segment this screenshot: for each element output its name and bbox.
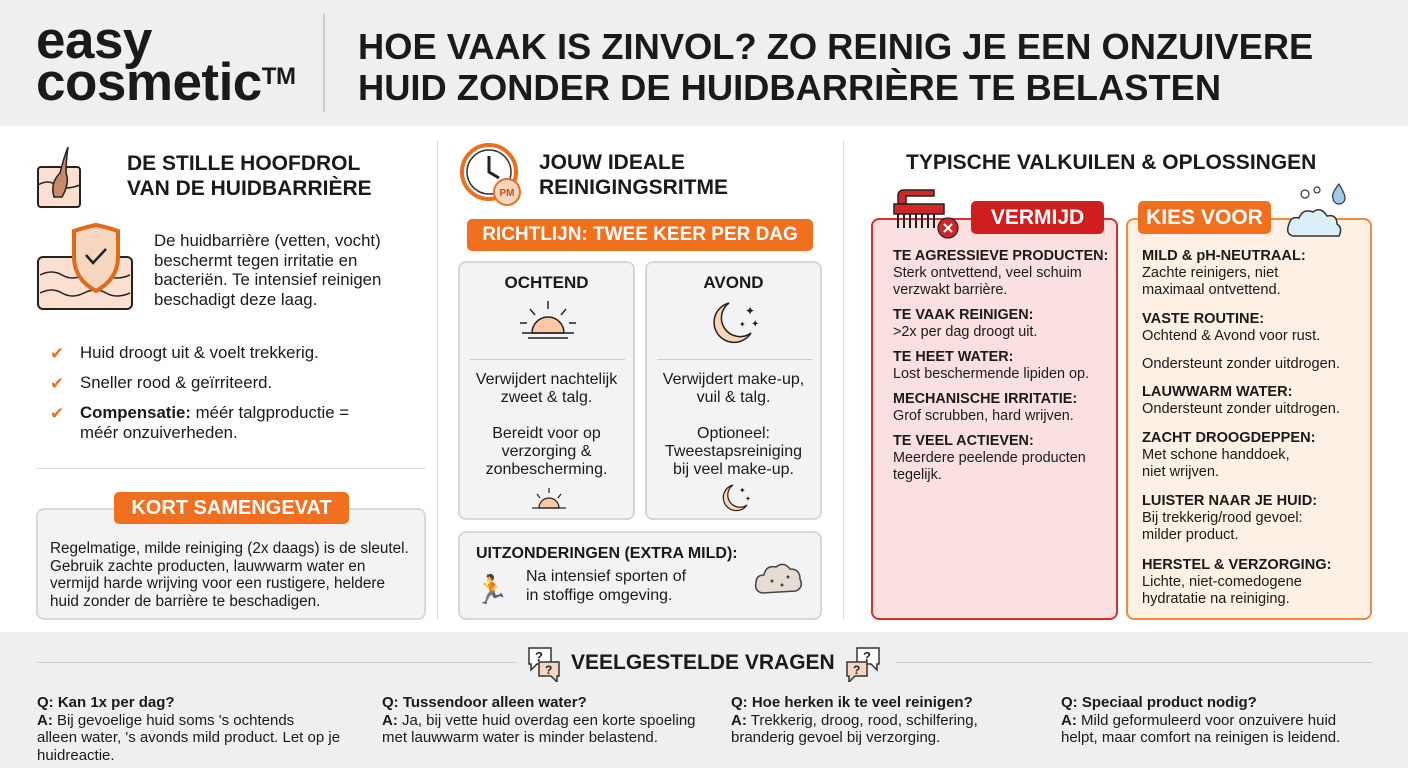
header band [0,0,1408,126]
panel: vermijd: Lost beschermende lipiden op. [893,366,1089,382]
panel: vermijd: verzwakt barrière. [893,282,1007,298]
panel: FAQ [0,632,1408,768]
logo [36,11,295,112]
faq 4: Q: Speciaal product nodig? [1061,694,1257,711]
card: avond: vuil & talg. [697,389,770,406]
panel: kies voor: milder product. [1142,527,1239,543]
icon: moon: ✦ [751,319,759,330]
faq 3 [731,694,978,746]
panel: kies voor: Bij trekkerig/rood gevoel: [1142,510,1303,526]
badge: kort samengevat [114,492,349,524]
checklist: ✔ [50,374,64,393]
checklist [50,343,349,442]
panel: kort samengevat [36,508,426,620]
card: ochtend: zweet & talg. [501,389,592,406]
card: ochtend: OCHTEND [504,273,589,292]
heading [127,152,372,200]
icon: dust cloud [754,564,802,594]
heading: FAQ: ? [545,663,552,677]
panel: vermijd: MECHANISCHE IRRITATIE: [893,391,1077,407]
title: HOE VAAK IS ZINVOL? ZO REINIG JE EEN ONZUIVERE [358,26,1313,67]
checklist: méér onzuiverheden. [80,423,238,442]
heading: FAQ [528,647,880,682]
icon: brush [893,189,959,239]
panel: kies voor: VASTE ROUTINE: [1142,311,1264,327]
card: avond: bij veel make-up. [673,461,794,478]
checklist: Huid droogt uit & voelt trekkerig. [80,343,319,362]
panel: vermijd: Meerdere peelende producten [893,450,1086,466]
icon: clock [460,143,521,206]
faq 4: helpt, maar comfort na reinigen is leidend. [1061,729,1340,746]
card: avond: Verwijdert make-up, [663,371,804,388]
panel: vermijd: tegelijk. [893,467,942,483]
heading: FAQ: ? [535,649,543,664]
panel: kies voor: maximaal ontvettend. [1142,282,1281,298]
card: ochtend: verzorging & [502,443,591,460]
icon: sunrise [520,301,576,339]
card: avond: ✦ [745,495,751,503]
badge: vermijd [971,201,1104,234]
panel: kies voor: Ochtend & Avond voor rust. [1142,328,1320,344]
icon: moon: ✦ [745,304,755,318]
checklist: ✔ [50,344,64,363]
card: uitzonderingen: UITZONDERINGEN (EXTRA MILD): [476,545,738,562]
badge: kies voor: KIES VOOR [1146,206,1263,229]
badge: kies voor [1138,201,1271,234]
panel: kies voor: LUISTER NAAR JE HUID: [1142,493,1317,509]
panel: vermijd: TE AGRESSIEVE PRODUCTEN: [893,248,1108,264]
text: barrier description [154,231,381,308]
icon: moon: ✦ [739,320,746,329]
heading: FAQ: ? [863,649,871,664]
faq 2 [382,694,696,746]
panel: vermijd: Sterk ontvettend, veel schuim [893,265,1082,281]
panel: vermijd: TE VEEL ACTIEVEN: [893,433,1034,449]
panel: vermijd: >2x per dag droogt uit. [893,324,1037,340]
faq 2: Q: Tussendoor alleen water? [382,694,587,711]
card: uitzonderingen [458,531,822,620]
faq 1: alleen water, 's avonds mild product. Let op je [37,729,340,746]
card: avond: AVOND [703,273,764,292]
text: summary: vermijd harde wrijving voor een rustigere, heldere [50,575,385,592]
faq 3: A: Trekkerig, droog, rood, schilfering, [731,712,978,728]
panel: kies voor: MILD & pH-NEUTRAAL: [1142,248,1306,264]
badge: vermijd: VERMIJD [991,206,1084,229]
faq 4: A: Mild geformuleerd voor onzuivere huid [1061,712,1336,728]
title: HUID ZONDER DE HUIDBARRIÈRE TE BELASTEN [358,67,1221,108]
heading: DE STILLE HOOFDROL [127,152,360,175]
panel: kies voor: Lichte, niet-comedogene [1142,574,1302,590]
faq 1: huidreactie. [37,746,115,764]
panel: reinigingsritme [460,143,728,206]
icon: runner: 🏃 [474,574,509,605]
faq 3: branderig gevoel bij verzorging. [731,729,940,746]
heading: valkuilen: TYPISCHE VALKUILEN & OPLOSSINGEN [906,151,1316,174]
card: avond [645,261,822,520]
faq 1: A: Bij gevoelige huid soms 's ochtends [37,712,294,728]
icon: shield skin [37,223,133,310]
checklist: ✔ [50,404,64,423]
icon: skin hair [37,146,81,208]
panel: kies voor: niet wrijven. [1142,464,1219,480]
panel: kies voor: Ondersteunt zonder uitdrogen. [1142,401,1340,417]
panel: vermijd: TE HEET WATER: [893,349,1013,365]
badge: richtlijn: RICHTLIJN: TWEE KEER PER DAG [482,224,798,245]
panel: kies voor: Ondersteunt zonder uitdrogen. [1142,356,1340,372]
text: summary: Regelmatige, milde reiniging (2x daags) is de sleutel. [50,540,409,557]
text: barrier description: bacteriën. Te intensief reinigen [154,270,381,289]
faq 2: met lauwwarm water is minder belastend. [382,729,658,746]
text: barrier description: De huidbarrière (vetten, vocht) [154,231,381,250]
heading: FAQ: ? [853,663,860,677]
faq 4 [1061,694,1340,746]
card: ochtend: zonbescherming. [486,461,607,478]
panel: kies voor: HERSTEL & VERZORGING: [1142,557,1331,573]
logo: easy [36,11,152,70]
card: avond: Tweestapsreiniging [665,443,802,460]
faq 1 [37,694,340,764]
card: ochtend: Verwijdert nachtelijk [476,371,617,388]
panel: kies voor: ZACHT DROOGDEPPEN: [1142,430,1316,446]
heading: REINIGINGSRITME [539,176,728,199]
card: avond: ✦ [739,486,746,495]
panel: kies voor: hydratatie na reiniging. [1142,591,1290,607]
panel: vermijd: TE VAAK REINIGEN: [893,307,1033,323]
title [358,26,1313,108]
logo: cosmeticTM [36,53,295,112]
panel: kies voor: LAUWWARM WATER: [1142,384,1292,400]
faq 2: A: Ja, bij vette huid overdag een korte spoeling [382,712,696,728]
heading: FAQ: VEELGESTELDE VRAGEN [571,651,835,674]
heading: JOUW IDEALE [539,151,685,174]
text: barrier description: beschermt tegen irritatie en [154,250,357,270]
panel: huidbarriere [37,146,381,442]
icon: clock: PM [500,188,514,199]
card: ochtend [458,261,635,520]
text: barrier description: beschadigt deze laag. [154,290,317,308]
card: uitzonderingen: Na intensief sporten of [526,568,686,585]
text: summary [50,540,409,610]
faq 3: Q: Hoe herken ik te veel reinigen? [731,694,973,711]
heading: VAN DE HUIDBARRIÈRE [127,177,372,200]
badge: richtlijn [467,219,813,251]
heading [539,151,728,199]
panel: vermijd [871,218,1118,620]
panel: kies voor [1126,218,1372,620]
checklist: Sneller rood & geïrriteerd. [80,373,272,392]
text: summary: Gebruik zachte producten, lauwwarm water en [50,558,365,574]
card: ochtend: Bereidt voor op [492,425,601,442]
icon: foam cloud [1286,183,1346,237]
panel: vermijd: Grof scrubben, hard wrijven. [893,408,1074,424]
faq 1: Q: Kan 1x per dag? [37,694,175,711]
card: uitzonderingen: in stoffige omgeving. [526,587,672,604]
panel: kies voor: Zachte reinigers, niet [1142,265,1278,281]
panel: kies voor: Met schone handdoek, [1142,447,1290,463]
card: avond: Optioneel: [697,425,770,442]
icon: moon [713,302,759,344]
badge: kort samengevat: KORT SAMENGEVAT [131,497,332,519]
text: summary: huid zonder de barrière te beschadigen. [50,592,320,610]
checklist: Compensatie: méér talgproductie = [80,403,349,422]
